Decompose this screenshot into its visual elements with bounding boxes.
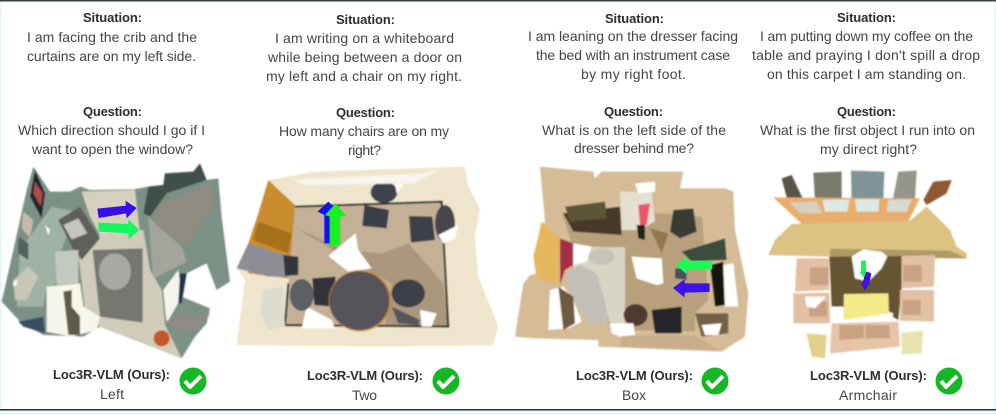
icon: green check 3 [702, 368, 728, 394]
icon: green check 2 [432, 368, 460, 394]
question text 4: Question: [837, 104, 896, 119]
answer 2: Loc3R-VLM (Ours): [307, 368, 423, 383]
arrow: blue [862, 272, 871, 291]
situation text 4 [752, 10, 980, 82]
situation text 3: Situation: [605, 11, 664, 26]
question text 4 [760, 104, 975, 157]
question text 2: Question: [336, 105, 395, 120]
question text 2 [279, 105, 449, 158]
answer 4: Armchair [839, 387, 897, 403]
situation text 2 [266, 12, 462, 84]
arrow: blue [318, 202, 339, 243]
question text 3: dresser behind me? [574, 140, 694, 156]
answer 4 [810, 368, 927, 403]
icon: green check 4 [936, 368, 962, 394]
situation text 4: table and praying I don't spill a drop [752, 47, 980, 63]
situation text 2: I am writing on a whiteboard [275, 30, 454, 46]
situation text 3: the bed with an instrument case [536, 47, 730, 63]
panel: example 3 [515, 11, 748, 403]
question text 4: my direct right? [820, 141, 917, 157]
answer 2 [307, 368, 423, 403]
arrow: green [676, 257, 712, 274]
question text 1: want to open the window? [31, 141, 193, 157]
situation text 4: I am putting down my coffee on the [760, 28, 973, 44]
answer 1 [53, 367, 170, 402]
scene: living room point cloud [768, 171, 967, 358]
situation text 3: I am leaning on the dresser facing [528, 28, 738, 44]
question text 3: What is on the left side of the [542, 122, 726, 138]
scene: meeting room point cloud [237, 167, 498, 347]
arrow: blue [673, 279, 710, 297]
arrow: green [98, 219, 139, 239]
arrow: green [325, 203, 346, 245]
situation text 3 [528, 11, 738, 82]
answer 4: Loc3R-VLM (Ours): [810, 368, 927, 383]
situation text 1: curtains are on my left side. [27, 48, 196, 64]
answer 3 [576, 368, 693, 403]
question text 2: right? [348, 142, 381, 158]
question text 1: Question: [83, 104, 142, 119]
question text 1: Which direction should I go if I [18, 122, 205, 138]
answer 1: Left [100, 386, 124, 402]
situation text 2: my left and a chair on my right. [266, 68, 462, 84]
answer 3: Loc3R-VLM (Ours): [576, 368, 693, 383]
arrow: blue [97, 201, 137, 218]
icon: green check 1 [180, 368, 206, 394]
question text 1 [18, 104, 205, 157]
situation text 4: Situation: [837, 10, 896, 25]
panel: example 1 [2, 10, 230, 402]
panel: example 2 [237, 12, 498, 403]
answer 2: Two [352, 387, 377, 403]
situation text 1 [27, 10, 197, 64]
scene: bedroom point cloud [515, 167, 748, 352]
question text 3: Question: [604, 104, 663, 119]
answer 3: Box [622, 387, 646, 403]
arrow: green [859, 261, 871, 278]
question text 3 [542, 104, 726, 156]
situation text 2: while being between a door on [267, 49, 462, 65]
situation text 3: by my right foot. [581, 66, 686, 82]
situation text 2: Situation: [336, 12, 395, 27]
situation text 1: I am facing the crib and the [27, 29, 197, 45]
panel: example 4 [752, 10, 980, 403]
question text 2: How many chairs are on my [279, 123, 449, 139]
question text 4: What is the first object I run into on [760, 122, 975, 138]
scene: nursery point cloud [2, 163, 230, 358]
situation text 1: Situation: [83, 10, 142, 25]
situation text 4: on this carpet I am standing on. [767, 66, 966, 82]
answer 1: Loc3R-VLM (Ours): [53, 367, 170, 382]
